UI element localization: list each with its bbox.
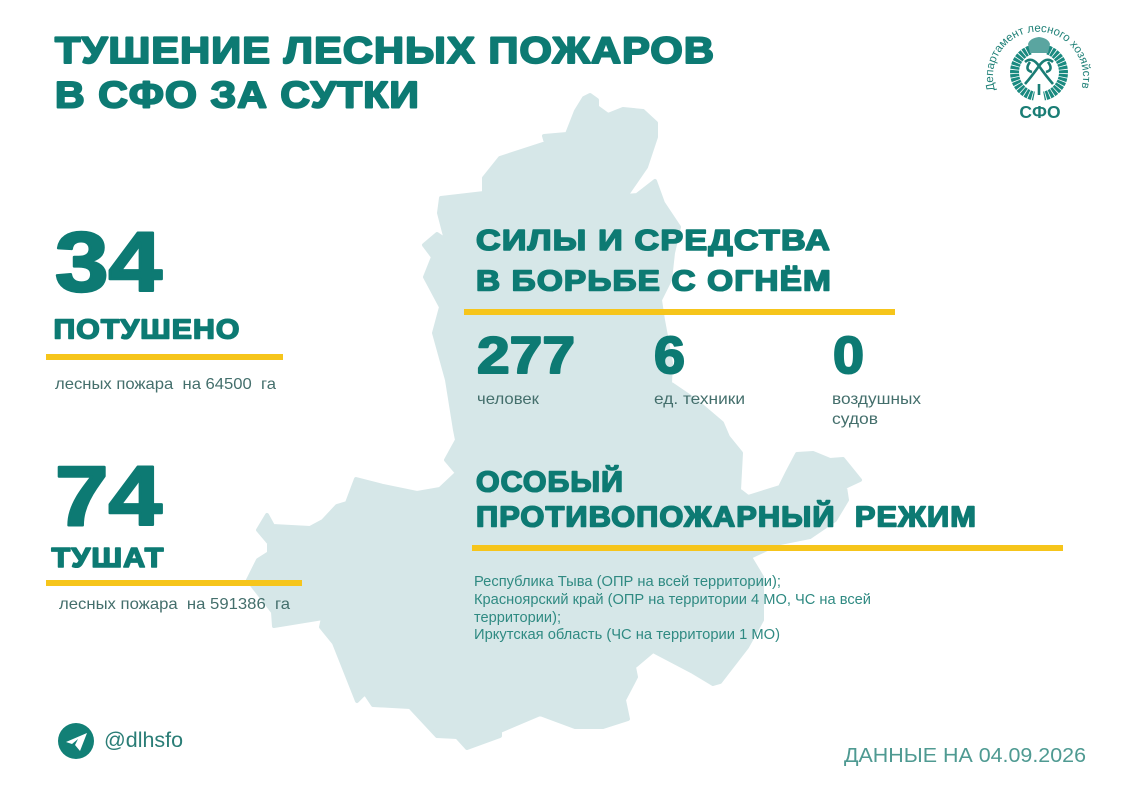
stat: active fires [46,449,302,613]
title: ТУШЕНИЕ ЛЕСНЫХ ПОЖАРОВ [55,30,715,71]
stat: extinguished fires: ПОТУШЕНО [54,314,241,344]
stat: extinguished fires: лесных пожара на 64500 га [55,376,276,393]
stat: active fires: ТУШАТ [52,542,164,573]
logo wreath [1015,50,1063,96]
logo: Department of Forestry emblem [986,26,1091,122]
logo caption: СФО [1019,102,1061,122]
data date: ДАННЫЕ НА 04.09.2026 [844,744,1086,767]
stat: extinguished fires: 34 [55,215,162,309]
stat: extinguished fires [46,215,283,393]
stat: people [477,327,575,408]
stat: active fires: 74 [55,449,162,543]
heading: special fire regime [472,464,1063,551]
stat: aircraft: 0 [833,327,864,385]
stat: aircraft: воздушных [832,391,921,408]
map: Siberian Federal District silhouette [248,95,860,748]
heading: forces and resources: СИЛЫ И СРЕДСТВА [476,225,831,257]
stat: vehicles: ед. техники [654,391,745,408]
telegram handle: @dlhsfo [104,729,183,752]
heading: forces and resources: В БОРЬБЕ С ОГНЁМ [476,264,832,298]
stat: people: человек [477,391,540,408]
title: В СФО ЗА СУТКИ [55,74,420,116]
heading: special fire regime: ОСОБЫЙ [476,464,624,498]
logo crown [1028,37,1050,53]
heading: forces and resources [464,225,895,315]
text block: list of regions: Иркутская область (ЧС на территории 1 МО) [474,626,780,643]
stat: vehicles [654,327,745,408]
logo monogram [1025,60,1053,95]
title [55,30,715,116]
stat: active fires: лесных пожара на 591386 га [59,596,290,613]
heading: special fire regime: ПРОТИВОПОЖАРНЫЙ РЕЖИМ [476,500,977,534]
text block: list of regions [474,573,871,643]
stat: vehicles: 6 [654,327,685,385]
text block: list of regions: Красноярский край (ОПР на территории 4 МО, ЧС на всей [474,591,871,608]
stat: people: 277 [477,327,575,385]
text block: list of regions: Республика Тыва (ОПР на всей территории); [474,573,781,590]
stat: aircraft [832,327,921,428]
text block: list of regions: территории); [474,609,561,626]
stat: aircraft: судов [832,411,878,428]
icon: telegram [58,723,94,759]
